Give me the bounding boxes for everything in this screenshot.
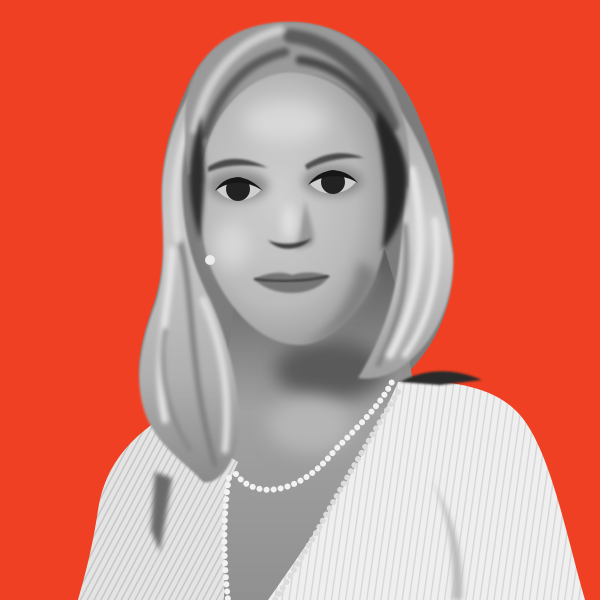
hair left lock [139,65,239,482]
blouse [78,371,585,600]
cheek shadow [300,260,378,345]
face [190,72,407,345]
right eye socket shadow [303,166,363,196]
nose shadow [296,200,314,250]
left eye socket shadow [208,171,268,201]
right eyebrow [305,153,364,170]
hair back layer [139,22,453,482]
left eyebrow [208,159,268,172]
left cheek highlight [214,221,250,269]
blouse shoulder shadow [151,472,172,552]
hair right lock [358,90,453,379]
pearl necklace [224,382,398,600]
forehead highlight [243,100,327,144]
right eye [310,172,356,194]
blouse left side [78,420,238,600]
mouth [254,272,329,293]
dark side hair at temple [190,115,205,240]
blouse right side [268,381,585,600]
earring [205,255,215,265]
nose tip [268,238,312,249]
hair top [185,22,409,190]
neck and chest [215,250,415,600]
left eye [217,179,261,200]
nose highlight [282,204,296,240]
